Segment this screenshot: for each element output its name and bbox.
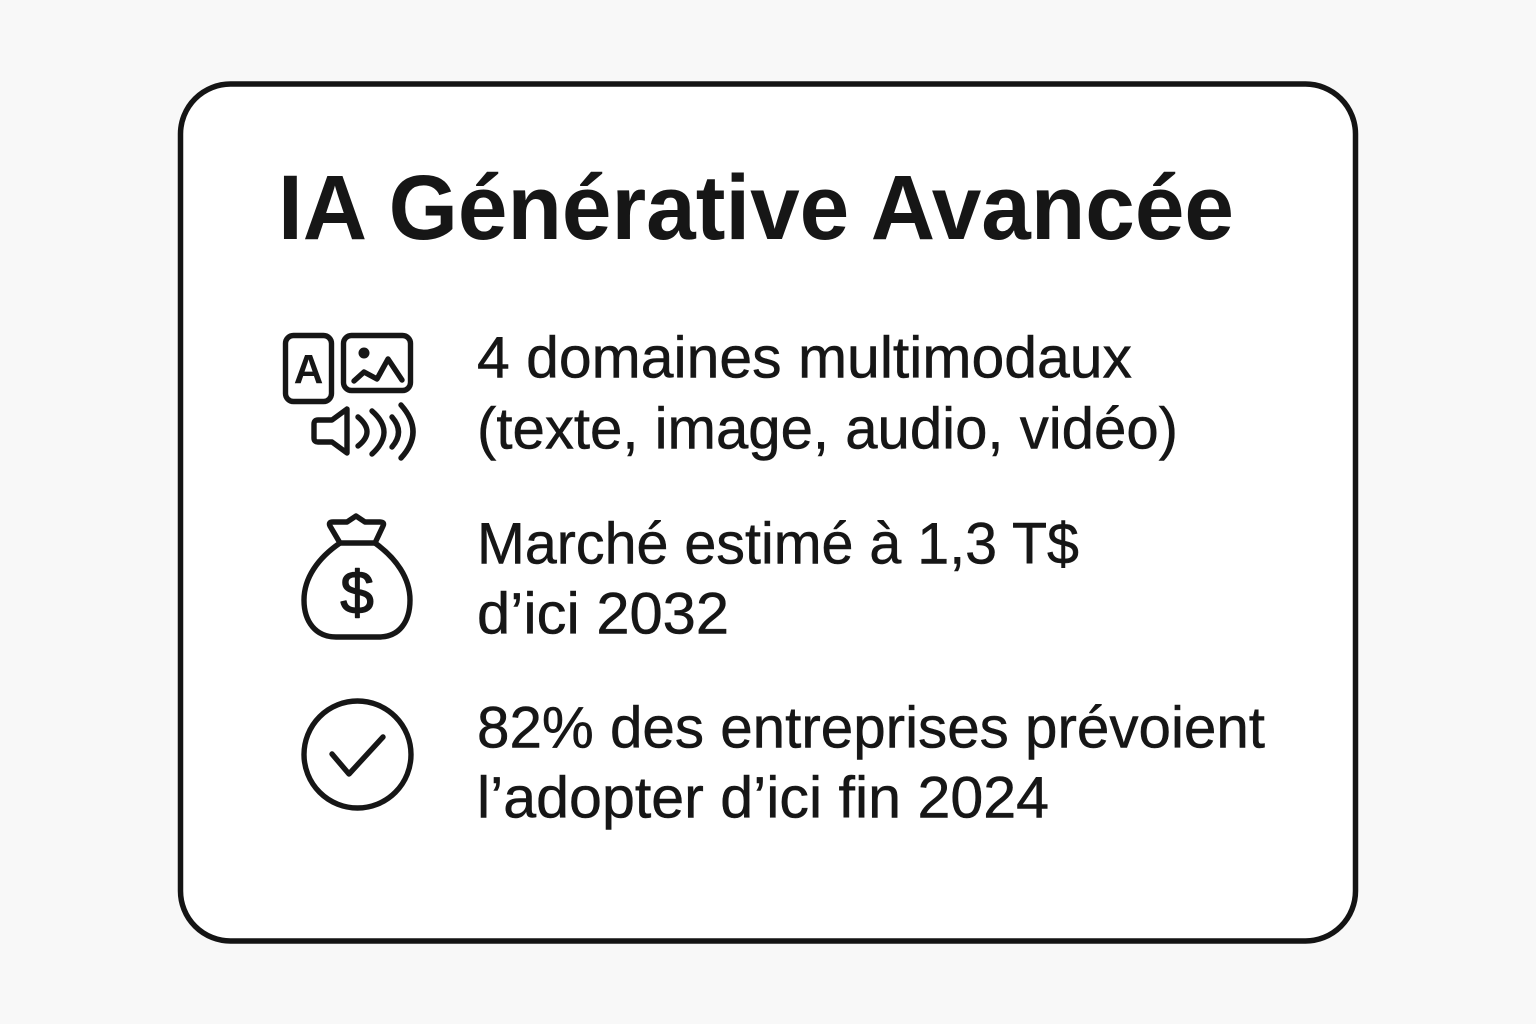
icon: money bag bbox=[304, 516, 410, 637]
icon: money bag: $ bbox=[340, 559, 374, 626]
panel: card bbox=[180, 84, 1356, 941]
text: multimodal domains: (texte, image, audio, vidéo) bbox=[477, 396, 1178, 462]
text: enterprise adoption: 82% des entreprises prévoient bbox=[477, 696, 1265, 760]
icon: multimodal text, image and audio bbox=[286, 336, 413, 458]
text: multimodal domains: 4 domaines multimodaux bbox=[477, 326, 1132, 390]
title: IA Générative Avancée bbox=[278, 157, 1234, 259]
text: multimodal domains bbox=[477, 326, 1178, 462]
icon part: speaker with sound waves bbox=[314, 405, 413, 458]
icon part: image card bbox=[344, 336, 410, 390]
icon: check circle bbox=[304, 701, 411, 808]
text: enterprise adoption: l’adopter d’ici fin 2024 bbox=[477, 766, 1049, 830]
text: market estimate bbox=[477, 512, 1079, 646]
text: market estimate: Marché estimé à 1,3 T$ bbox=[477, 512, 1079, 576]
icon part: text card: A bbox=[294, 346, 323, 392]
text: enterprise adoption bbox=[477, 696, 1265, 830]
text: market estimate: d’ici 2032 bbox=[477, 582, 729, 646]
